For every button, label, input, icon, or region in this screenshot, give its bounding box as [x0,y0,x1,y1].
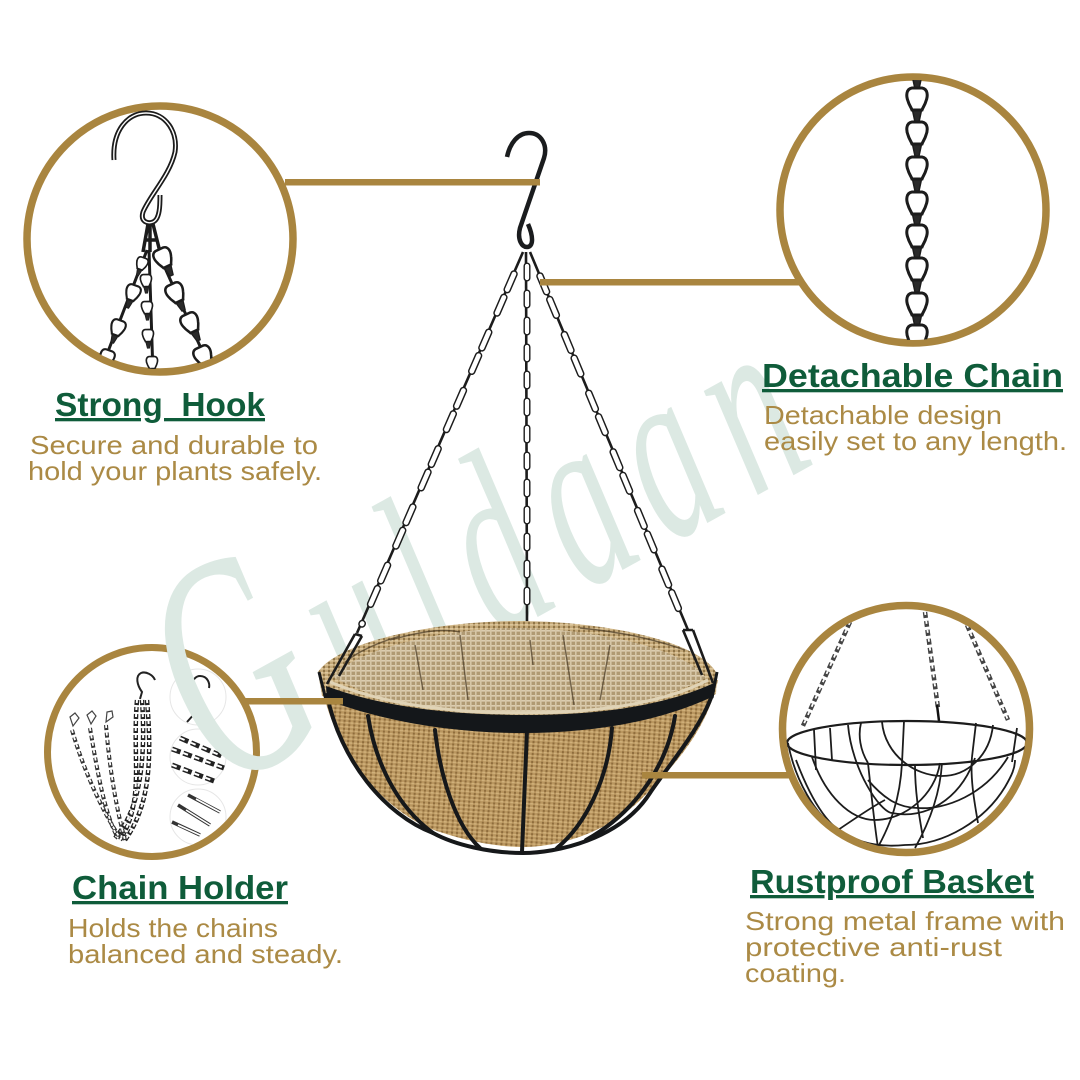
front rim highlight [330,680,708,713]
connector: chain holder [245,698,343,704]
text: basket description [745,906,1065,988]
heading: Chain Holder: Chain Holder [72,869,288,906]
text: chain description: Detachable design [764,400,1002,430]
text: chain description [764,400,1067,456]
inner liner creases [345,628,685,705]
heading: Strong Hook: Strong Hook [55,386,266,423]
text: basket description: Strong metal frame with [745,906,1065,936]
text: hook description: Secure and durable to [30,430,318,460]
basket inner liner [333,628,706,713]
basket with coir liner [318,621,718,853]
text: chain holder description [68,913,343,969]
panel: strong hook detail circle [27,106,293,377]
text: hook description [28,430,322,486]
basket rim band [326,683,714,733]
connector: chain [540,279,800,286]
connector: basket [642,772,790,778]
basket ribs [327,695,712,853]
basket rim lip [318,621,717,722]
icon: chain links [907,55,927,359]
text: chain holder description: Holds the chains [68,913,278,943]
heading: Detachable Chain: Detachable Chain [762,357,1063,394]
text: basket description: coating. [745,958,846,988]
watermark: Guldaan script: Guldaan [86,205,871,852]
panel: rustproof basket detail circle [782,606,1030,852]
text: hook description: hold your plants safely. [28,456,322,486]
end links to rim [327,630,713,684]
basket outer liner [320,680,718,847]
icon: chain set [70,669,226,845]
panel: detachable chain detail circle [780,55,1046,359]
heading: Rustproof Basket: Rustproof Basket [750,863,1034,900]
icon: hook with chains [100,110,213,369]
text: basket description: protective anti-rust [745,932,1003,962]
icon: main S hook [507,133,545,247]
text: chain description: easily set to any length. [764,426,1067,456]
hanging chains [357,252,688,633]
panel: chain holder detail circle [48,648,256,856]
text: chain holder description: balanced and steady. [68,939,343,969]
icon: wire basket frame [787,612,1027,848]
rim end posts [319,672,717,700]
connector: hook [285,179,540,186]
